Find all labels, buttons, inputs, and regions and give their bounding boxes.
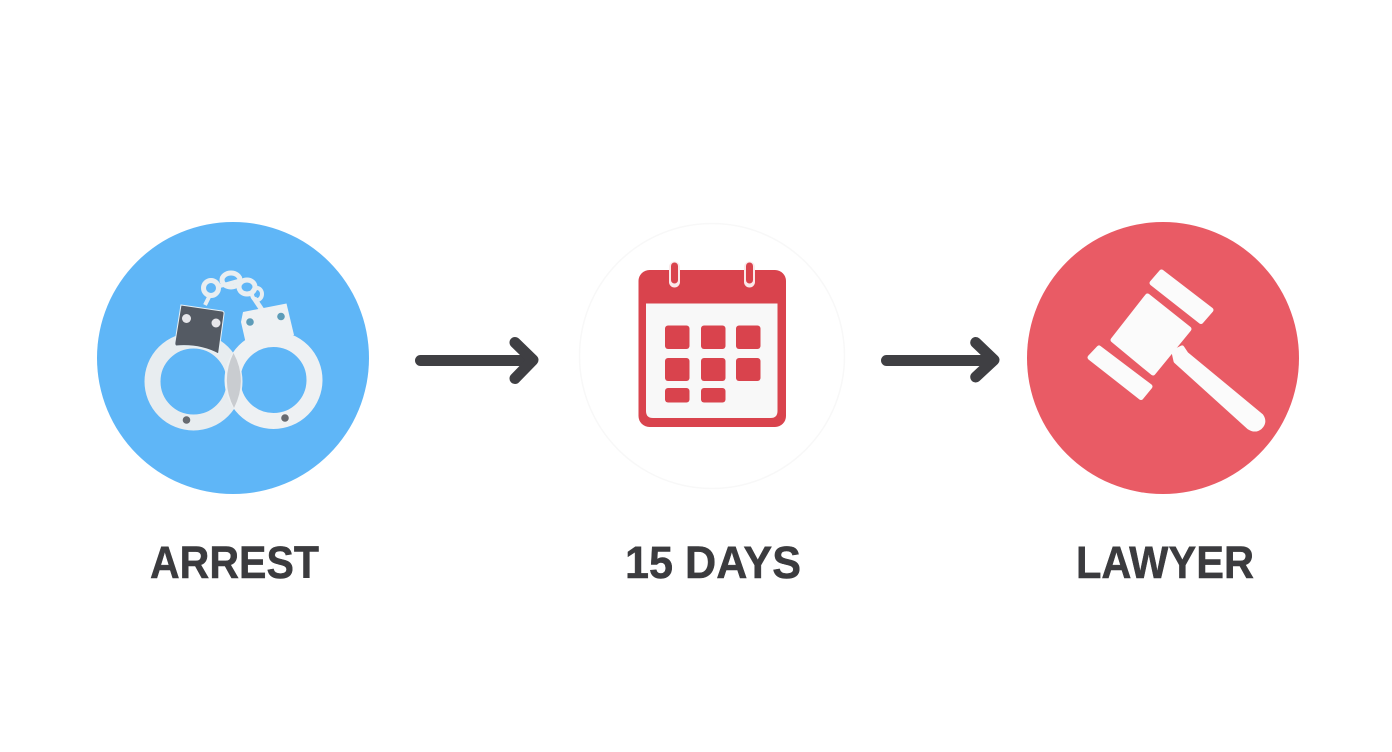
binder rings — [674, 266, 750, 282]
icon: 15 days calendar in white circle — [580, 224, 844, 488]
icon: lawyer gavel in red circle — [1027, 222, 1299, 494]
gavel handle — [1174, 348, 1263, 429]
icon: arrest handcuffs in blue circle — [97, 222, 369, 494]
arrow 2 — [886, 342, 994, 377]
right cuff ring — [232, 339, 314, 421]
calendar body — [638, 270, 786, 427]
right light plate — [241, 304, 294, 344]
label: arrest: ARREST — [150, 537, 319, 588]
label: lawyer: LAWYER — [1076, 537, 1254, 588]
rivets — [183, 416, 190, 424]
date cells — [665, 326, 760, 402]
calendar page — [646, 304, 778, 418]
gavel top bar — [1152, 272, 1211, 322]
label: 15 days: 15 DAYS — [625, 537, 801, 588]
chain — [204, 273, 262, 310]
gavel bottom bar — [1090, 348, 1150, 398]
left cuff ring — [152, 340, 234, 422]
arrow 1 — [420, 342, 533, 378]
left dark plate — [175, 305, 224, 354]
gavel head — [1113, 296, 1189, 373]
overlap of rings — [227, 353, 241, 408]
